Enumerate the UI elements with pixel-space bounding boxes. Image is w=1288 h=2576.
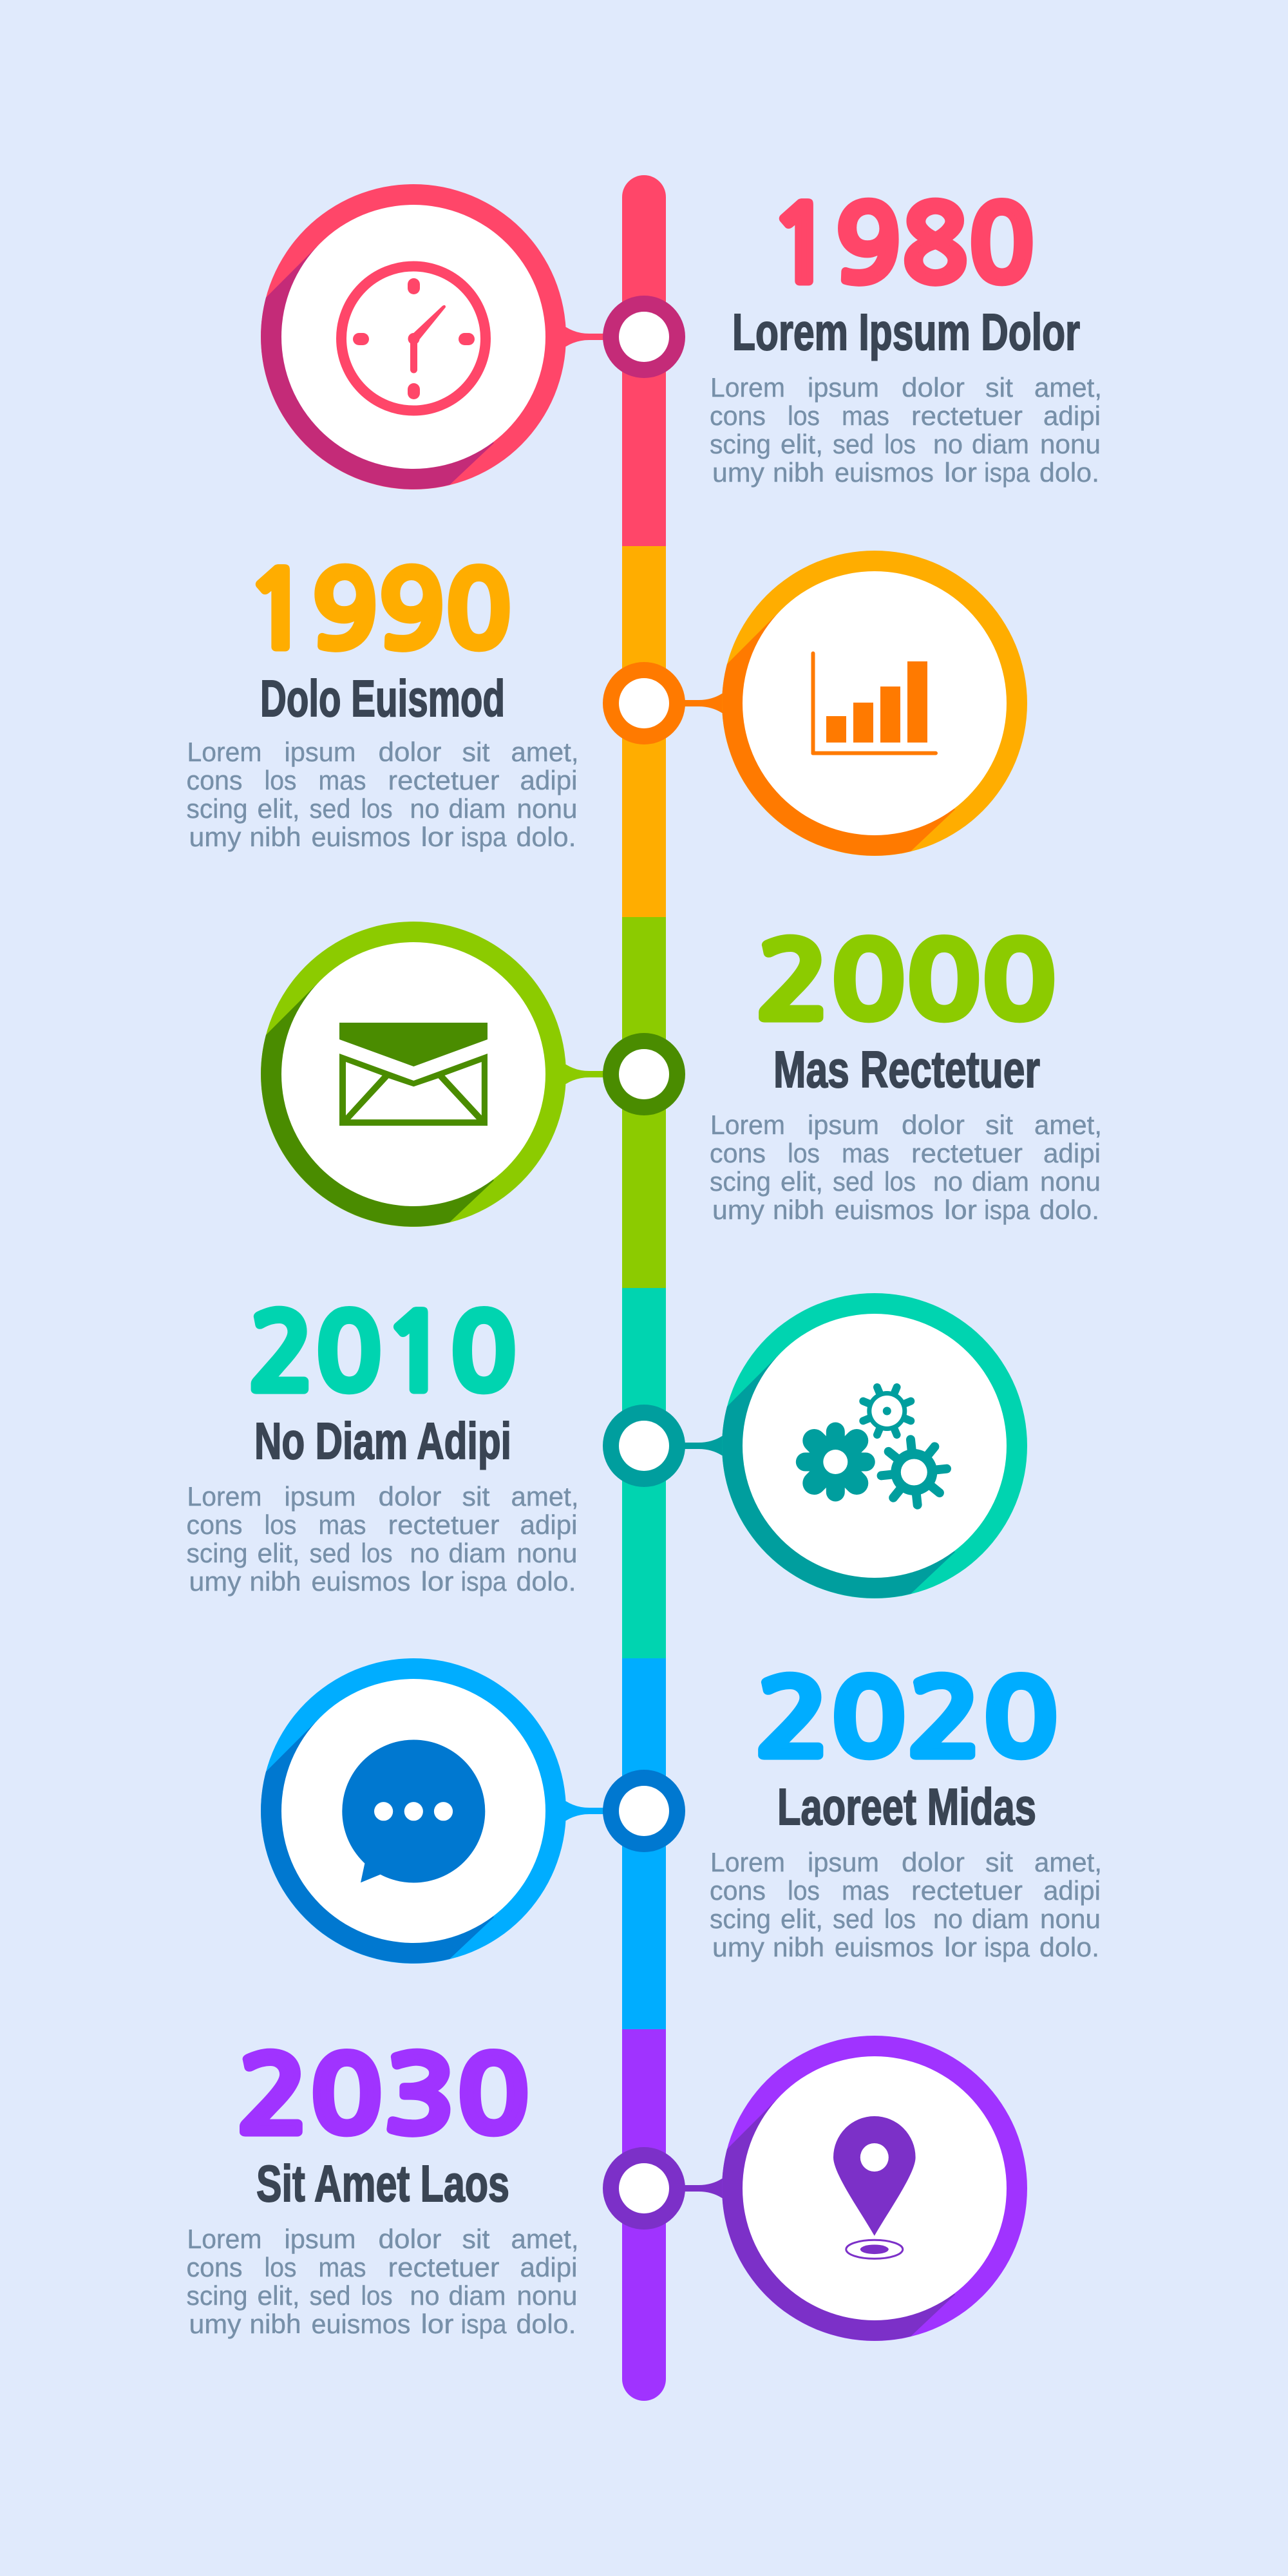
text block 1980: [710, 372, 1102, 488]
text block 2000: no: [933, 1166, 963, 1197]
panel: 2000: [261, 922, 1102, 1227]
text block 2030: mas: [318, 2252, 366, 2282]
text block 2020: nibh: [773, 1932, 824, 1962]
icon circle 1980: [261, 184, 566, 489]
text block 2030: nibh: [250, 2309, 301, 2339]
text block 2020: ipsum: [808, 1847, 879, 1877]
text block 1990: los: [264, 765, 296, 795]
text block 2010: nonu: [516, 1538, 577, 1568]
text block 2010: Lorem: [187, 1481, 261, 1511]
text block 2020: no: [933, 1904, 963, 1934]
text block 2010: sed: [309, 1538, 350, 1568]
year 1980: 1980: [768, 193, 1035, 298]
text block 2010: scing: [187, 1538, 247, 1568]
title 2010: No Diam Adipi: [254, 1412, 511, 1470]
text block 2020: sit: [985, 1847, 1013, 1877]
text block 2020: los: [884, 1904, 916, 1934]
icon: envelope: [339, 1023, 488, 1126]
connector 2030: [679, 2179, 728, 2198]
text block 2010: lor: [421, 1566, 454, 1596]
text block 2030: dolor: [379, 2224, 442, 2254]
text block 2000: scing: [710, 1166, 771, 1197]
text block 1990: scing: [187, 793, 247, 824]
text block 2000: nonu: [1040, 1166, 1101, 1197]
year 2000: 2000: [755, 929, 1057, 1035]
text block 1980: diam: [972, 429, 1029, 459]
text block 2030: nonu: [516, 2280, 577, 2311]
text block 2010: umy: [189, 1566, 241, 1596]
text block 2030: umy: [189, 2309, 241, 2339]
connector 1980: [560, 327, 609, 346]
text block 1980: cons: [710, 401, 766, 431]
icon circle 1990: [722, 551, 1027, 856]
text block 2020: dolor: [902, 1847, 965, 1877]
text block 2030: amet,: [511, 2224, 578, 2254]
text block 2010: cons: [187, 1510, 242, 1540]
text block 2030: dolo.: [516, 2309, 576, 2339]
panel: 1990: [187, 551, 1027, 856]
text block 1980: rectetuer: [911, 401, 1023, 431]
text block 2020: diam: [972, 1904, 1029, 1934]
text block 2030: los: [361, 2280, 393, 2311]
text block 2010: amet,: [511, 1481, 578, 1511]
panel: 1980: [261, 184, 1102, 489]
text block 2010: adipi: [520, 1510, 577, 1540]
year 2010: 2010: [248, 1301, 517, 1406]
text block 1990: sit: [462, 737, 490, 767]
text block 2010: diam: [448, 1538, 506, 1568]
node 1980: [603, 296, 685, 378]
panel: 2030: [187, 2036, 1027, 2341]
year 2020: 2020: [755, 1667, 1059, 1772]
text block 1990: dolo.: [516, 822, 576, 852]
text block 1980: los: [884, 429, 916, 459]
text block 2020: amet,: [1034, 1847, 1102, 1877]
text block 1980: los: [788, 401, 820, 431]
text block 2030: lor: [421, 2309, 454, 2339]
node 2010: [603, 1405, 685, 1487]
text block 2020: sed: [833, 1904, 874, 1934]
text block 2010: sit: [462, 1481, 490, 1511]
icon: clock: [341, 267, 486, 411]
text block 1990: dolor: [379, 737, 442, 767]
text block 2020: scing: [710, 1904, 771, 1934]
icon circle 2030: [722, 2036, 1027, 2341]
text block 1990: amet,: [511, 737, 578, 767]
text block 2000: euismos: [835, 1195, 934, 1225]
title 2030: Sit Amet Laos: [256, 2155, 509, 2212]
text block 1990: sed: [309, 793, 350, 824]
icon: bar chart: [811, 652, 938, 755]
text block 1980: euismos: [835, 457, 934, 488]
text block 1990: ipsum: [285, 737, 355, 767]
text block 2000: umy: [712, 1195, 764, 1225]
icon: gears: [805, 1387, 960, 1519]
text block 2000: mas: [842, 1138, 889, 1168]
text block 2010: euismos: [312, 1566, 411, 1596]
text block 1980: sit: [985, 372, 1013, 402]
text block 2000: rectetuer: [911, 1138, 1023, 1168]
text block 2020: nonu: [1040, 1904, 1101, 1934]
text block 2000: sit: [985, 1110, 1013, 1140]
text block 1980: amet,: [1034, 372, 1102, 402]
year 2030: 2030: [236, 2043, 530, 2149]
text block 1980: nibh: [773, 457, 824, 488]
text block 1980: dolo.: [1039, 457, 1099, 488]
panel: 2020: [261, 1658, 1102, 1964]
text block 1980: lor: [944, 457, 977, 488]
text block 2030: rectetuer: [388, 2252, 500, 2282]
text block 1990: elit,: [258, 793, 300, 824]
title 1990: Dolo Euismod: [260, 670, 505, 727]
text block 1990: los: [361, 793, 393, 824]
text block 2030: scing: [187, 2280, 247, 2311]
text block 2020: cons: [710, 1875, 766, 1906]
text block 2000: dolor: [902, 1110, 965, 1140]
text block 1980: ispa: [984, 457, 1030, 488]
text block 1990: cons: [187, 765, 242, 795]
text block 2000: nibh: [773, 1195, 824, 1225]
text block 2020: dolo.: [1039, 1932, 1099, 1962]
text block 1980: ipsum: [808, 372, 879, 402]
text block 2000: Lorem: [710, 1110, 785, 1140]
text block 1980: Lorem: [710, 372, 785, 402]
text block 1980: nonu: [1040, 429, 1101, 459]
text block 2020: [710, 1847, 1102, 1962]
text block 2030: no: [410, 2280, 439, 2311]
text block 1980: mas: [842, 401, 889, 431]
title 1980: Lorem Ipsum Dolor: [732, 303, 1080, 361]
text block 1990: Lorem: [187, 737, 261, 767]
text block 1990: rectetuer: [388, 765, 500, 795]
text block 1990: [187, 737, 578, 852]
text block 2000: diam: [972, 1166, 1029, 1197]
node 2000: [603, 1033, 685, 1115]
text block 2020: rectetuer: [911, 1875, 1023, 1906]
icon: location pin: [833, 2116, 916, 2259]
text block 1990: nibh: [250, 822, 301, 852]
title 2000: Mas Rectetuer: [773, 1041, 1040, 1098]
text block 2000: los: [884, 1166, 916, 1197]
text block 2020: umy: [712, 1932, 764, 1962]
node 2030: [603, 2147, 685, 2230]
text block 2020: euismos: [835, 1932, 934, 1962]
timeline bar: [622, 175, 666, 2401]
panel: 2010: [187, 1293, 1027, 1598]
text block 1990: adipi: [520, 765, 577, 795]
text block 2010: elit,: [258, 1538, 300, 1568]
text block 1990: no: [410, 793, 439, 824]
text block 1990: umy: [189, 822, 241, 852]
text block 2010: ispa: [461, 1566, 507, 1596]
text block 1980: no: [933, 429, 963, 459]
text block 2020: adipi: [1043, 1875, 1101, 1906]
text block 2010: dolor: [379, 1481, 442, 1511]
text block 1980: umy: [712, 457, 764, 488]
text block 2000: cons: [710, 1138, 766, 1168]
text block 2030: Lorem: [187, 2224, 261, 2254]
text block 1980: scing: [710, 429, 771, 459]
text block 2020: ispa: [984, 1932, 1030, 1962]
title 2020: Laoreet Midas: [777, 1778, 1036, 1835]
text block 1980: sed: [833, 429, 874, 459]
text block 2000: adipi: [1043, 1138, 1101, 1168]
connector 2000: [560, 1065, 609, 1084]
text block 2020: lor: [944, 1932, 977, 1962]
text block 2010: mas: [318, 1510, 366, 1540]
text block 2010: rectetuer: [388, 1510, 500, 1540]
text block 2030: cons: [187, 2252, 242, 2282]
icon: chat bubble: [342, 1740, 485, 1883]
text block 2020: elit,: [781, 1904, 823, 1934]
node 1990: [603, 662, 685, 744]
text block 2020: los: [788, 1875, 820, 1906]
text block 1990: ispa: [461, 822, 507, 852]
text block 1990: euismos: [312, 822, 411, 852]
text block 1980: dolor: [902, 372, 965, 402]
text block 1990: diam: [448, 793, 506, 824]
text block 2000: ispa: [984, 1195, 1030, 1225]
connector 1990: [679, 694, 728, 713]
text block 1980: adipi: [1043, 401, 1101, 431]
connector 2010: [679, 1436, 728, 1455]
text block 2030: los: [264, 2252, 296, 2282]
icon circle 2020: [261, 1658, 566, 1964]
text block 2000: elit,: [781, 1166, 823, 1197]
text block 2030: elit,: [258, 2280, 300, 2311]
text block 2010: los: [264, 1510, 296, 1540]
text block 2030: euismos: [312, 2309, 411, 2339]
text block 2010: [187, 1481, 578, 1596]
text block 2020: mas: [842, 1875, 889, 1906]
text block 2030: ipsum: [285, 2224, 355, 2254]
text block 2030: adipi: [520, 2252, 577, 2282]
node 2020: [603, 1770, 685, 1852]
text block 1980: elit,: [781, 429, 823, 459]
text block 2000: amet,: [1034, 1110, 1102, 1140]
year 1990: 1990: [245, 558, 512, 664]
text block 2010: los: [361, 1538, 393, 1568]
text block 2030: sed: [309, 2280, 350, 2311]
text block 2010: dolo.: [516, 1566, 576, 1596]
icon circle 2010: [722, 1293, 1027, 1598]
text block 2010: nibh: [250, 1566, 301, 1596]
text block 2000: [710, 1110, 1102, 1225]
text block 2000: dolo.: [1039, 1195, 1099, 1225]
text block 1990: mas: [318, 765, 366, 795]
text block 1990: nonu: [516, 793, 577, 824]
text block 2000: los: [788, 1138, 820, 1168]
text block 2000: sed: [833, 1166, 874, 1197]
text block 2000: lor: [944, 1195, 977, 1225]
text block 2030: [187, 2224, 578, 2339]
text block 2000: ipsum: [808, 1110, 879, 1140]
text block 1990: lor: [421, 822, 454, 852]
connector 2020: [560, 1801, 609, 1821]
text block 2020: Lorem: [710, 1847, 785, 1877]
text block 2010: ipsum: [285, 1481, 355, 1511]
text block 2010: no: [410, 1538, 439, 1568]
icon circle 2000: [261, 922, 566, 1227]
text block 2030: diam: [448, 2280, 506, 2311]
text block 2030: sit: [462, 2224, 490, 2254]
text block 2030: ispa: [461, 2309, 507, 2339]
